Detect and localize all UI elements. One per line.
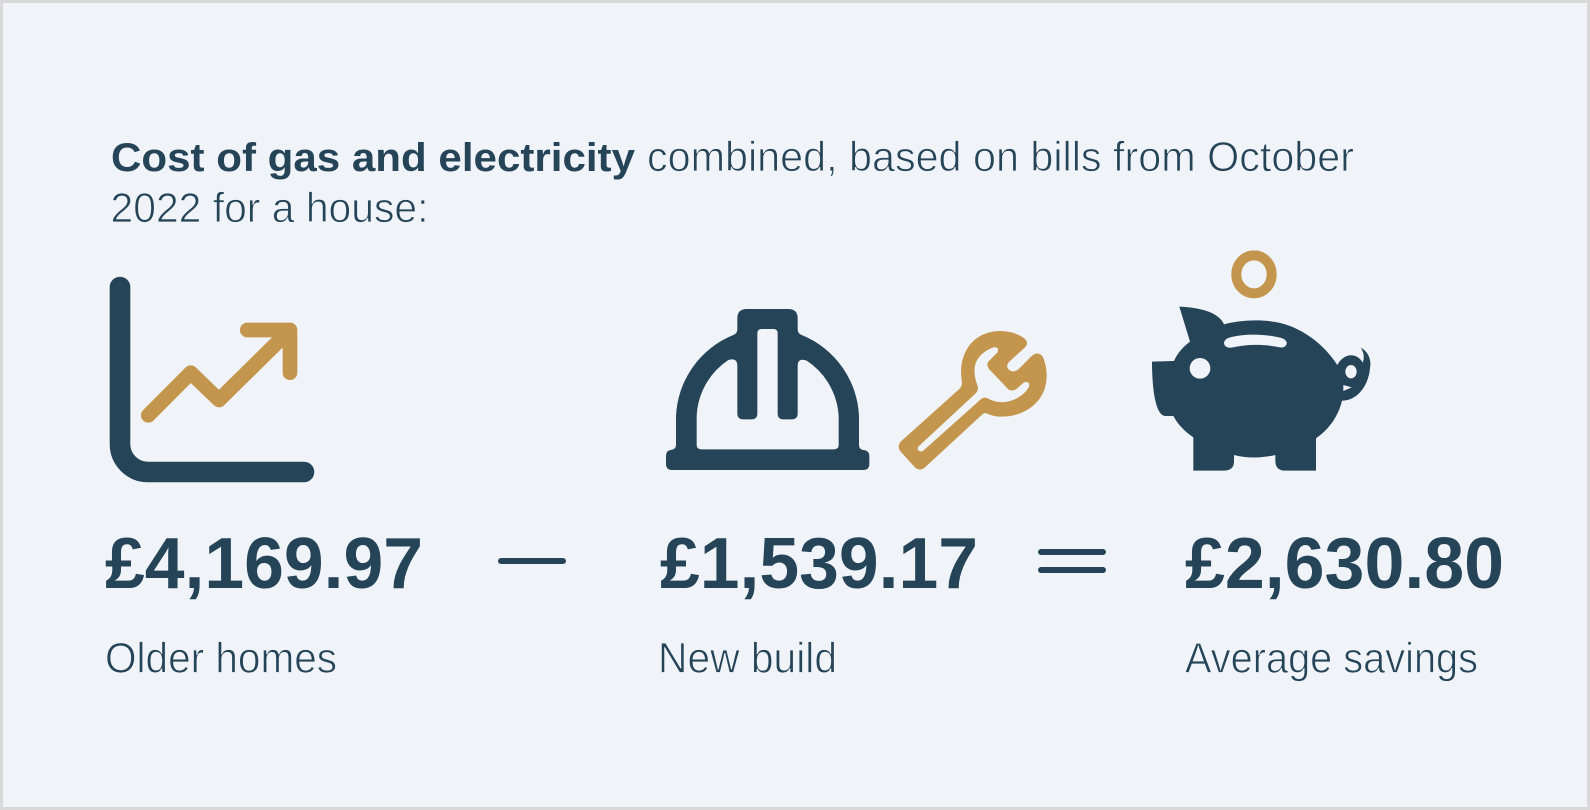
- equals sign: [1038, 549, 1106, 573]
- tail loop: [1345, 365, 1357, 378]
- icon: piggy bank with coin: [1152, 255, 1370, 471]
- value: new build: £1,539.17: [660, 524, 978, 604]
- icon: hard hat: [666, 309, 869, 470]
- value: average savings: £2,630.80: [1185, 524, 1504, 604]
- label: new build: New build: [658, 636, 837, 682]
- heading: combined, based on bills from October: [647, 133, 1354, 180]
- icon: rising line chart: [120, 287, 304, 472]
- minus sign: [498, 558, 566, 564]
- pig eye: [1190, 358, 1210, 379]
- heading: 2022 for a house:: [110, 184, 428, 231]
- icon: wrench: [899, 331, 1047, 469]
- heading: [110, 133, 1354, 231]
- label: average savings: Average savings: [1185, 636, 1478, 682]
- coin: [1236, 255, 1272, 293]
- pig body: [1152, 307, 1370, 471]
- label: older homes: Older homes: [105, 636, 337, 682]
- heading: Cost of gas and electricity: [111, 136, 636, 180]
- value: older homes: £4,169.97: [105, 524, 423, 604]
